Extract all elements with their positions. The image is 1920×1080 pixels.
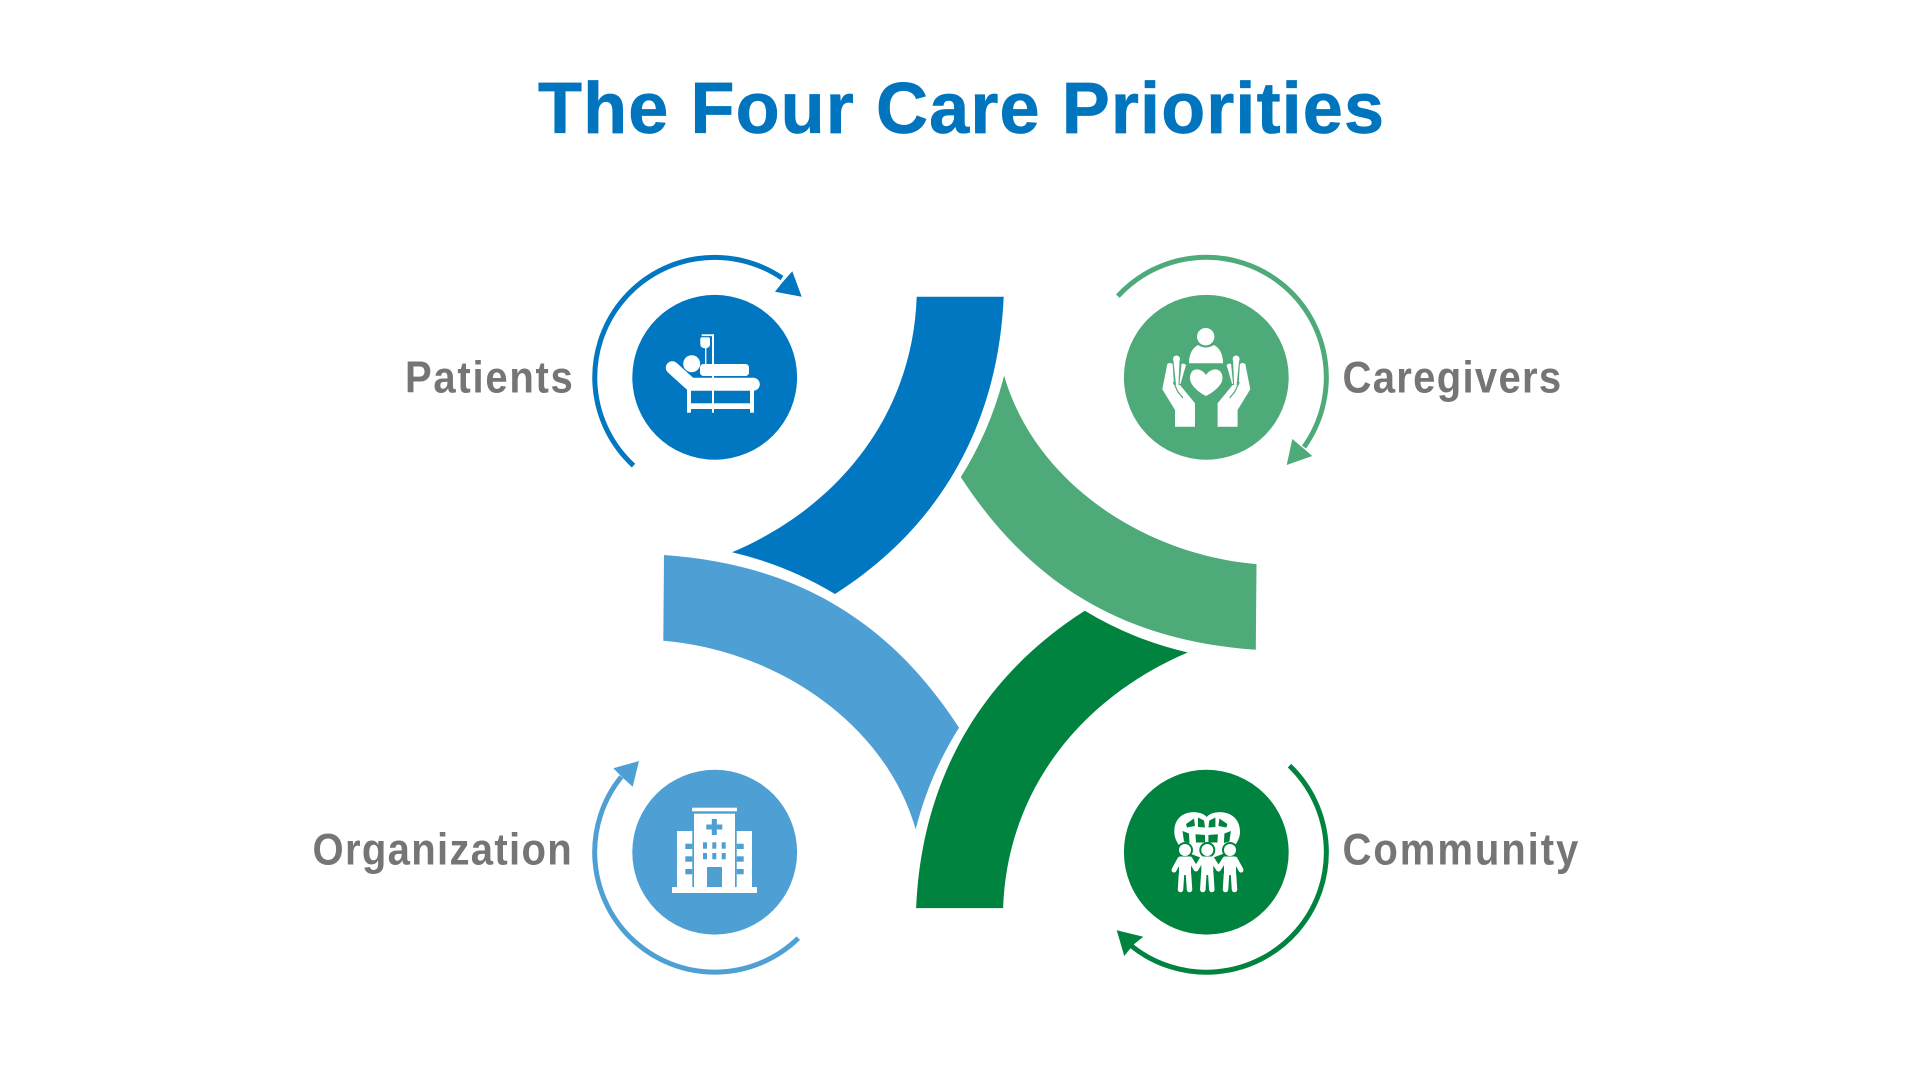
arc: organization (light blue) — [663, 555, 959, 829]
circular arrow: community — [1117, 766, 1326, 972]
icon circle: caregivers — [1124, 295, 1289, 460]
label: caregivers: Caregivers — [1342, 353, 1561, 402]
icon circle: organization — [632, 770, 797, 935]
circular arrow: caregivers — [1118, 257, 1326, 465]
arc: caregivers (light green) — [961, 376, 1256, 650]
icon: hospital building — [672, 808, 757, 893]
label: community: Community — [1342, 824, 1579, 874]
arc: community (dark green) — [916, 611, 1188, 908]
arc: patients (blue) — [732, 297, 1004, 594]
panel: community — [1117, 766, 1579, 972]
panel: patients — [405, 257, 802, 466]
label: organization: Organization — [312, 824, 572, 874]
icon: people under heart globe — [1174, 812, 1241, 890]
panel: organization — [312, 761, 798, 972]
circular arrow: patients — [595, 257, 802, 466]
icon circle: patients — [632, 295, 797, 460]
panel: caregivers — [1118, 257, 1561, 465]
icon: patient in hospital bed — [672, 334, 754, 413]
icon: caring hands with person and heart — [1162, 328, 1250, 427]
label: patients: Patients — [405, 353, 573, 402]
central four-arc star — [663, 297, 1256, 908]
icon circle: community — [1124, 770, 1289, 935]
title: The Four Care Priorities — [538, 69, 1384, 149]
circular arrow: organization — [595, 761, 798, 972]
